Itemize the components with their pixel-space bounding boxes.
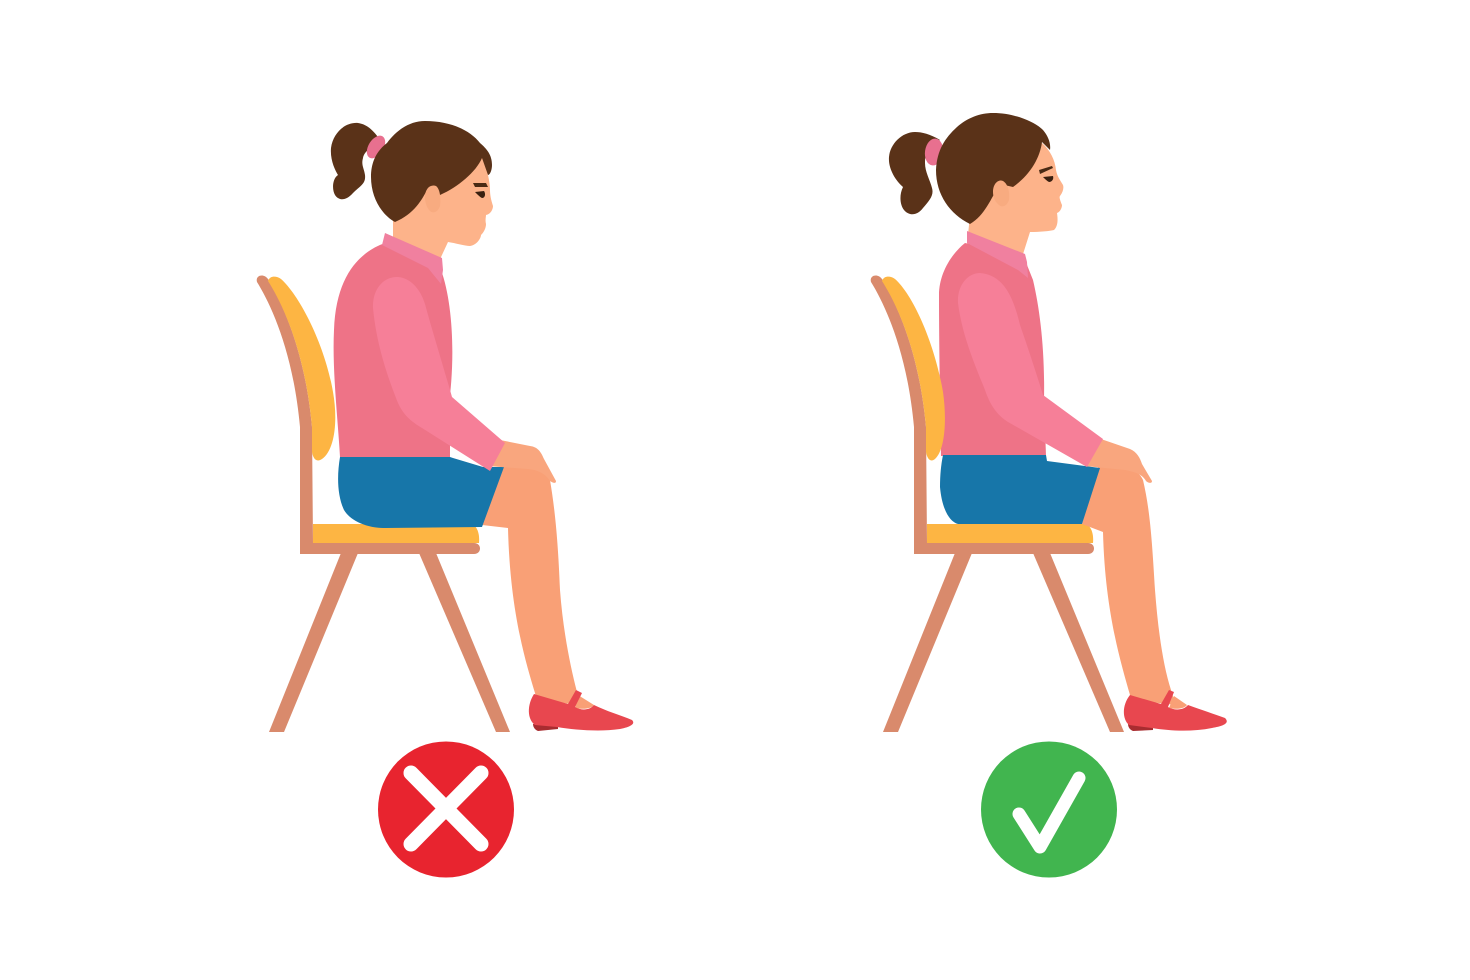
icon: green check bbox=[981, 742, 1117, 878]
shoe bbox=[529, 690, 633, 731]
ear bbox=[425, 185, 440, 212]
hair tie bbox=[923, 137, 945, 167]
arm: sleeve bbox=[373, 277, 505, 471]
hand bbox=[1085, 438, 1152, 483]
skirt bbox=[940, 455, 1100, 524]
torso: pink shirt bbox=[939, 231, 1046, 456]
hair tie bbox=[363, 132, 389, 162]
head and neck bbox=[889, 113, 1063, 270]
legs bbox=[482, 460, 580, 705]
panel: correct posture bbox=[871, 113, 1227, 732]
hair bbox=[936, 113, 1050, 224]
ear bbox=[993, 181, 1009, 206]
face bbox=[967, 143, 1063, 270]
eyebrow bbox=[473, 183, 488, 187]
shoe bbox=[1124, 690, 1227, 731]
hand bbox=[488, 440, 556, 483]
skirt bbox=[338, 457, 504, 528]
icon: red cross bbox=[378, 742, 514, 878]
panel: incorrect posture bbox=[257, 121, 633, 732]
chair: left bbox=[257, 275, 510, 732]
legs bbox=[1082, 460, 1176, 705]
eye bbox=[1043, 176, 1053, 182]
arm: sleeve bbox=[958, 273, 1103, 467]
eyebrow bbox=[1039, 166, 1053, 174]
head and neck bbox=[331, 121, 493, 270]
face bbox=[393, 150, 493, 270]
ponytail bbox=[889, 132, 940, 214]
ponytail bbox=[331, 123, 380, 199]
torso: pink shirt bbox=[334, 233, 452, 457]
hair bbox=[371, 121, 492, 222]
chair: right bbox=[871, 275, 1124, 732]
eye bbox=[475, 191, 485, 198]
